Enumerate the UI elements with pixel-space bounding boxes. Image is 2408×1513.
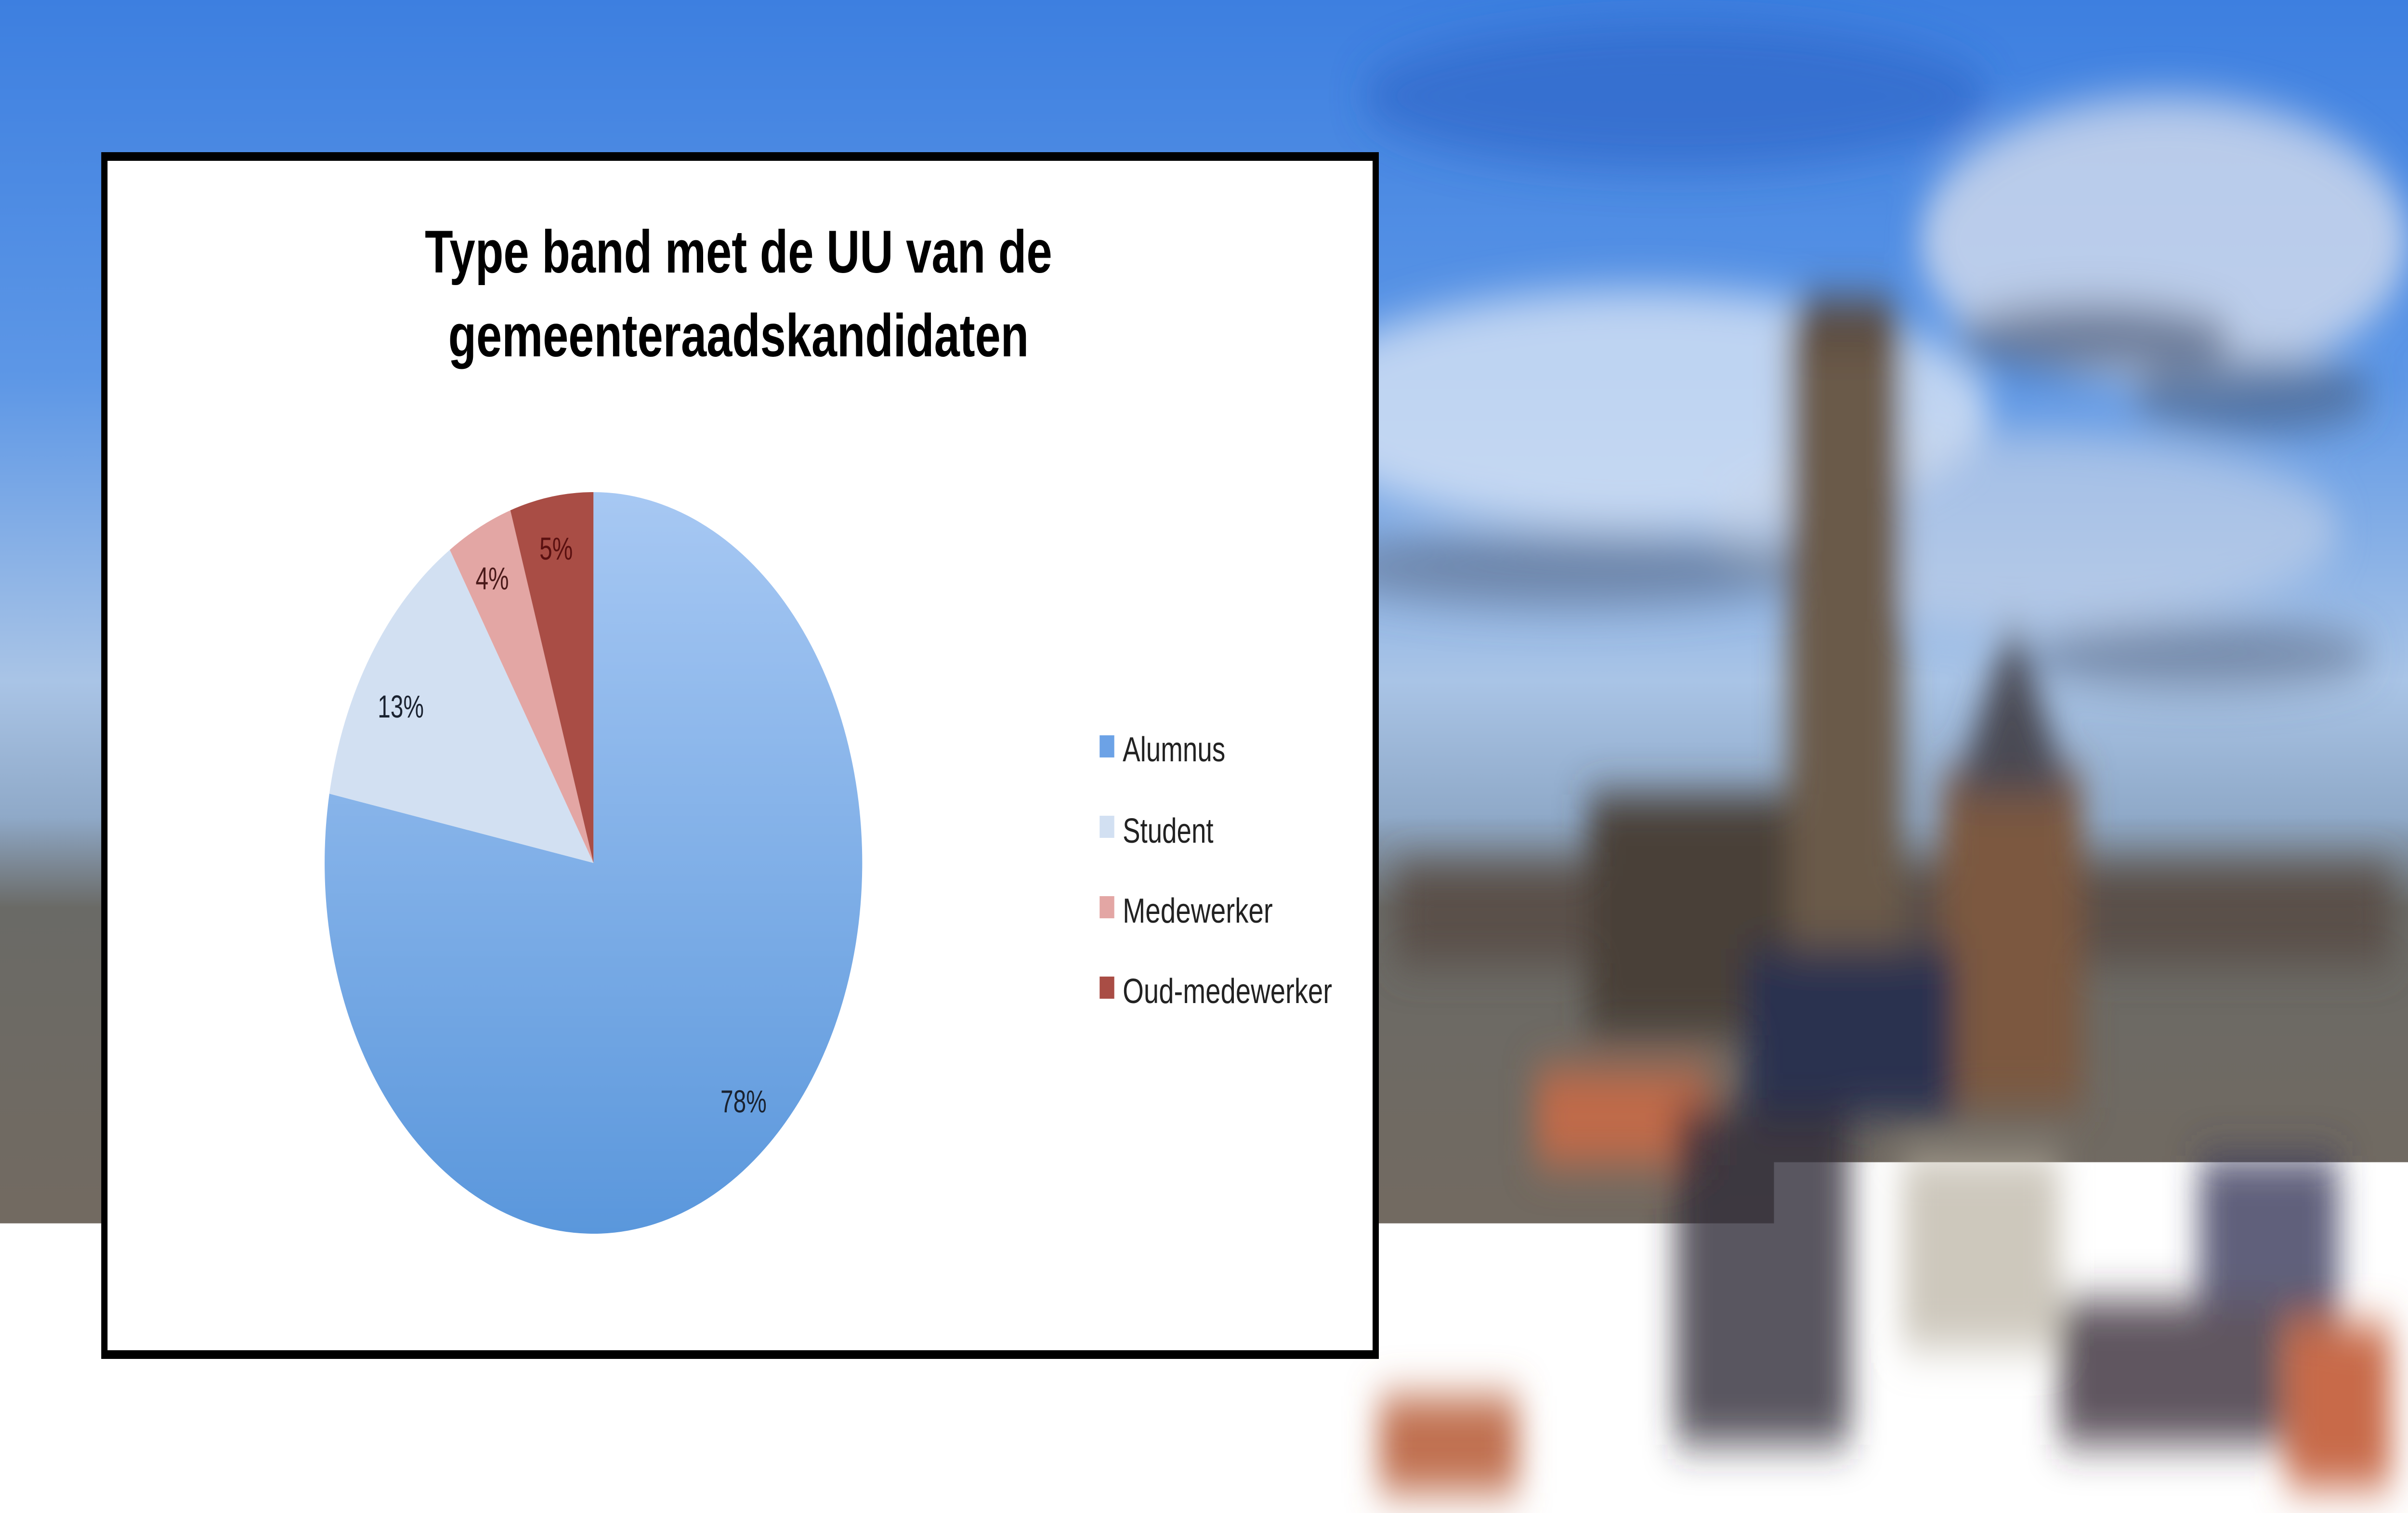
slice: Student 13%	[329, 550, 593, 863]
data labels: 5%	[539, 532, 573, 567]
title: Type band met de UU van de	[425, 219, 1052, 286]
legend: Student	[1123, 812, 1214, 850]
data labels: 78%	[720, 1084, 767, 1120]
pie chart	[325, 492, 862, 1234]
slice: Oud-medewerker 5%	[510, 492, 593, 863]
data labels	[378, 532, 767, 1120]
legend	[1099, 730, 1332, 1011]
slice: Alumnus 78%	[325, 492, 862, 1234]
legend: Alumnus	[1123, 730, 1225, 769]
data labels: 4%	[475, 561, 509, 597]
legend: Oud-medewerker	[1123, 972, 1332, 1011]
slice: Medewerker 4%	[450, 510, 593, 863]
panel: chart	[105, 157, 1376, 1355]
legend: Medewerker	[1123, 892, 1273, 930]
title	[425, 219, 1052, 369]
data labels: 13%	[378, 690, 424, 725]
title: gemeenteraadskandidaten	[448, 302, 1029, 369]
